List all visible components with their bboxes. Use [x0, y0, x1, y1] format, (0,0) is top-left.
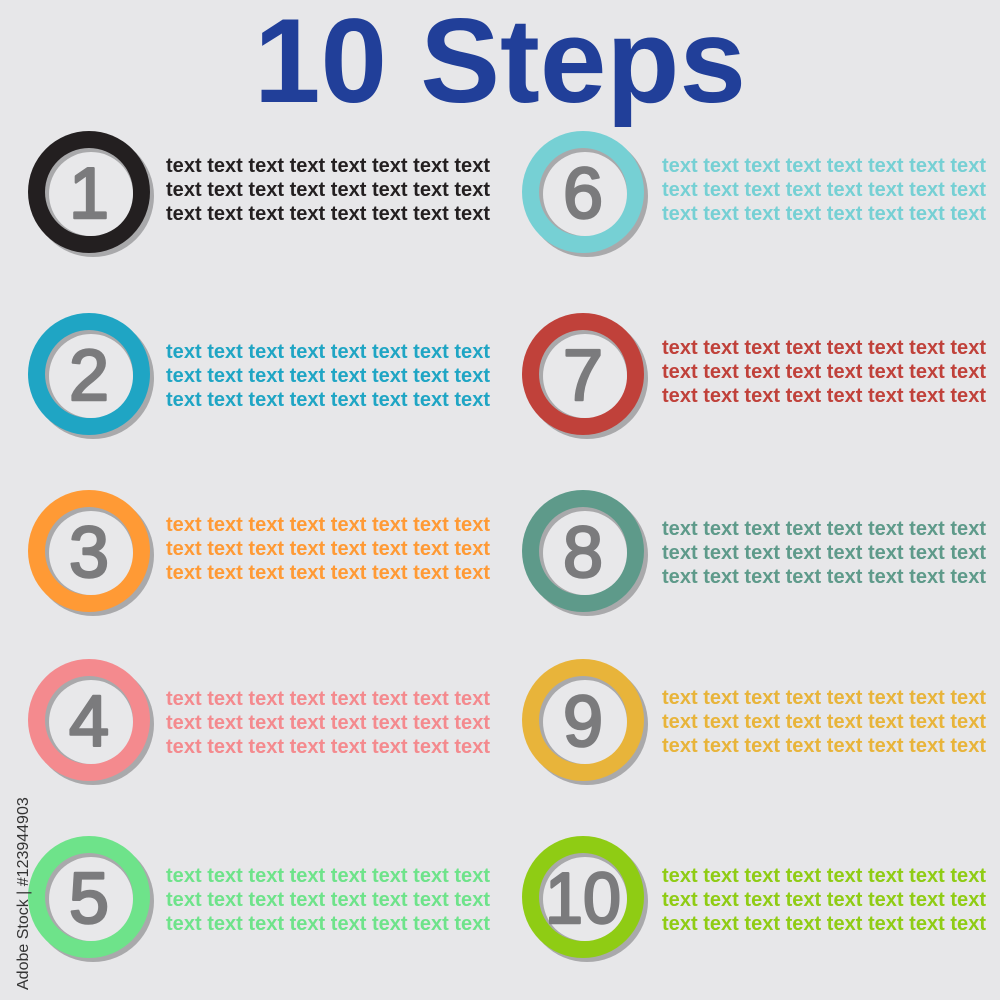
step 10 — [522, 836, 986, 962]
step 9 — [522, 659, 986, 785]
step 8: text text text text text text text text — [662, 566, 986, 588]
step 5: text text text text text text text text — [166, 913, 490, 935]
step 4: text text text text text text text text — [166, 712, 490, 734]
step 4: text text text text text text text text — [166, 736, 490, 758]
step 1: text text text text text text text text — [166, 179, 490, 201]
step 2 — [28, 313, 490, 439]
step 3: text text text text text text text text — [166, 538, 490, 560]
step 6: text text text text text text text text — [662, 203, 986, 225]
step 9: 9 — [563, 682, 603, 762]
step 8: 8 — [563, 513, 603, 593]
step 2: 2 — [69, 336, 109, 416]
step 10: text text text text text text text text — [662, 913, 986, 935]
step 1: text text text text text text text text — [166, 203, 490, 225]
step 2: text text text text text text text text — [166, 365, 490, 387]
step 5: text text text text text text text text — [166, 889, 490, 911]
step 7: text text text text text text text text — [662, 385, 986, 407]
step 9: text text text text text text text text — [662, 735, 986, 757]
step 10: text text text text text text text text — [662, 889, 986, 911]
step 3: 3 — [69, 513, 109, 593]
step 9: text text text text text text text text — [662, 687, 986, 709]
step 4: 4 — [69, 682, 109, 762]
watermark id: Adobe Stock | #123944903 — [15, 797, 32, 990]
step 2: text text text text text text text text — [166, 341, 490, 363]
step 2: text text text text text text text text — [166, 389, 490, 411]
step 8 — [522, 490, 986, 616]
step 7: text text text text text text text text — [662, 337, 986, 359]
step 4: text text text text text text text text — [166, 688, 490, 710]
step 6 — [522, 131, 986, 257]
step 5 — [28, 836, 490, 962]
step 8: text text text text text text text text — [662, 518, 986, 540]
step 7: 7 — [563, 336, 603, 416]
step 1: 1 — [69, 154, 109, 234]
step 3: text text text text text text text text — [166, 562, 490, 584]
step 6: text text text text text text text text — [662, 155, 986, 177]
step 5: text text text text text text text text — [166, 865, 490, 887]
step 10: text text text text text text text text — [662, 865, 986, 887]
step 6: text text text text text text text text — [662, 179, 986, 201]
step 5: 5 — [69, 859, 109, 939]
step 7: text text text text text text text text — [662, 361, 986, 383]
step 6: 6 — [563, 154, 603, 234]
step 3 — [28, 490, 490, 616]
step 10: 10 — [545, 859, 621, 939]
step 7 — [522, 313, 986, 439]
step 8: text text text text text text text text — [662, 542, 986, 564]
step 3: text text text text text text text text — [166, 514, 490, 536]
step 1 — [28, 131, 490, 257]
step 1: text text text text text text text text — [166, 155, 490, 177]
step 4 — [28, 659, 490, 785]
step 9: text text text text text text text text — [662, 711, 986, 733]
